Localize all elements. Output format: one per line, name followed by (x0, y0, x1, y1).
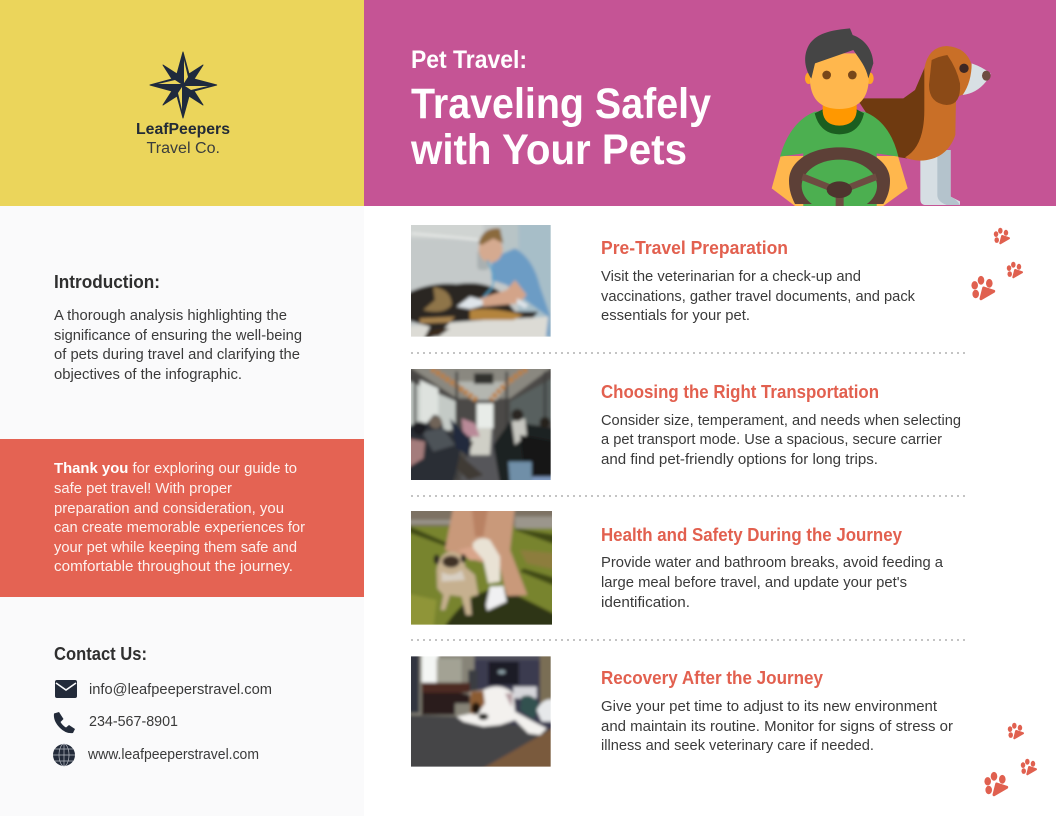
title: with Your Pets (410, 126, 687, 174)
text: health and safety (601, 555, 944, 611)
panel: thank you (0, 439, 364, 597)
panel: thank you: Thank you for exploring our guide to (54, 461, 297, 477)
panel: thank you: safe pet travel! With proper (54, 481, 232, 497)
icon: driver with dog (772, 28, 991, 212)
text: recovery: Give your pet time to adjust to its new environment (601, 699, 937, 715)
panel: thank you: comfortable throughout the journey. (54, 559, 293, 575)
text: choosing transportation: and find pet-friendly options for long trips. (601, 452, 878, 468)
icon: envelope (55, 680, 77, 698)
introduction text (54, 308, 302, 383)
introduction text: A thorough analysis highlighting the (54, 308, 287, 324)
icon: globe (53, 744, 75, 766)
text: health and safety: large meal before travel, and update your pet's (601, 575, 907, 591)
heading: pre-travel preparation: Pre-Travel Preparation (601, 237, 788, 258)
introduction text: objectives of the infographic. (54, 367, 242, 383)
text: pre-travel preparation: Visit the veterinarian for a check-up and (601, 269, 861, 285)
panel: thank you: your pet while keeping them safe and (54, 540, 297, 556)
text: pre-travel preparation: vaccinations, gather travel documents, and pack (601, 289, 916, 305)
photo: woman with pug (411, 511, 552, 625)
heading: contact: Contact Us: (54, 644, 147, 664)
panel: introduction (54, 272, 302, 383)
heading: introduction: Introduction: (54, 272, 160, 292)
text: recovery: and maintain its routine. Monitor for signs of stress or (601, 719, 953, 735)
text: pre-travel preparation: essentials for your pet. (601, 308, 750, 324)
panel: thank you: can create memorable experiences for (54, 520, 305, 536)
logo wordmark (136, 121, 230, 157)
icon: paw prints bottom (984, 723, 1036, 795)
icon: paw prints top (971, 228, 1022, 299)
section: pre-travel preparation (407, 222, 916, 340)
introduction text: significance of ensuring the well-being (54, 328, 302, 344)
heading: recovery: Recovery After the Journey (601, 667, 824, 688)
text: recovery (601, 699, 953, 754)
text: choosing transportation (601, 413, 961, 468)
title: Traveling Safely (411, 80, 711, 128)
photo: vet examining dog (411, 225, 551, 337)
text: recovery: illness and seek veterinary care if needed. (601, 738, 874, 754)
introduction text: of pets during travel and clarifying the (54, 347, 300, 363)
panel: thank you: preparation and consideration, you (54, 501, 284, 517)
contact phone: 234-567-8901 (89, 714, 178, 730)
heading: health and safety: Health and Safety During the Journey (601, 524, 903, 545)
icon: compass star (150, 52, 217, 118)
section: health and safety (407, 507, 944, 628)
section: choosing transportation (407, 365, 961, 483)
section: recovery (407, 652, 953, 770)
text: health and safety: Provide water and bathroom breaks, avoid feeding a (601, 555, 944, 571)
icon: phone (54, 712, 75, 733)
contact email: info@leafpeeperstravel.com (89, 682, 272, 698)
text: pre-travel preparation (601, 269, 916, 324)
heading: choosing transportation: Choosing the Right Transportation (601, 381, 879, 402)
contact website: www.leafpeeperstravel.com (87, 747, 259, 763)
text: health and safety: identification. (601, 595, 690, 611)
panel: contact (53, 644, 272, 766)
text: choosing transportation: a pet transport mode. Use a spacious, secure carrier (601, 432, 942, 448)
logo wordmark: LeafPeepers (136, 121, 230, 138)
panel: logo (0, 0, 364, 206)
photo: bus passengers (411, 369, 551, 480)
text: choosing transportation: Consider size, temperament, and needs when selecting (601, 413, 961, 429)
logo wordmark: Travel Co. (146, 140, 220, 157)
title: Pet Travel: (411, 46, 527, 74)
photo: bulldog resting on rug (411, 656, 551, 767)
title (410, 46, 711, 174)
panel: header banner (364, 0, 1056, 212)
